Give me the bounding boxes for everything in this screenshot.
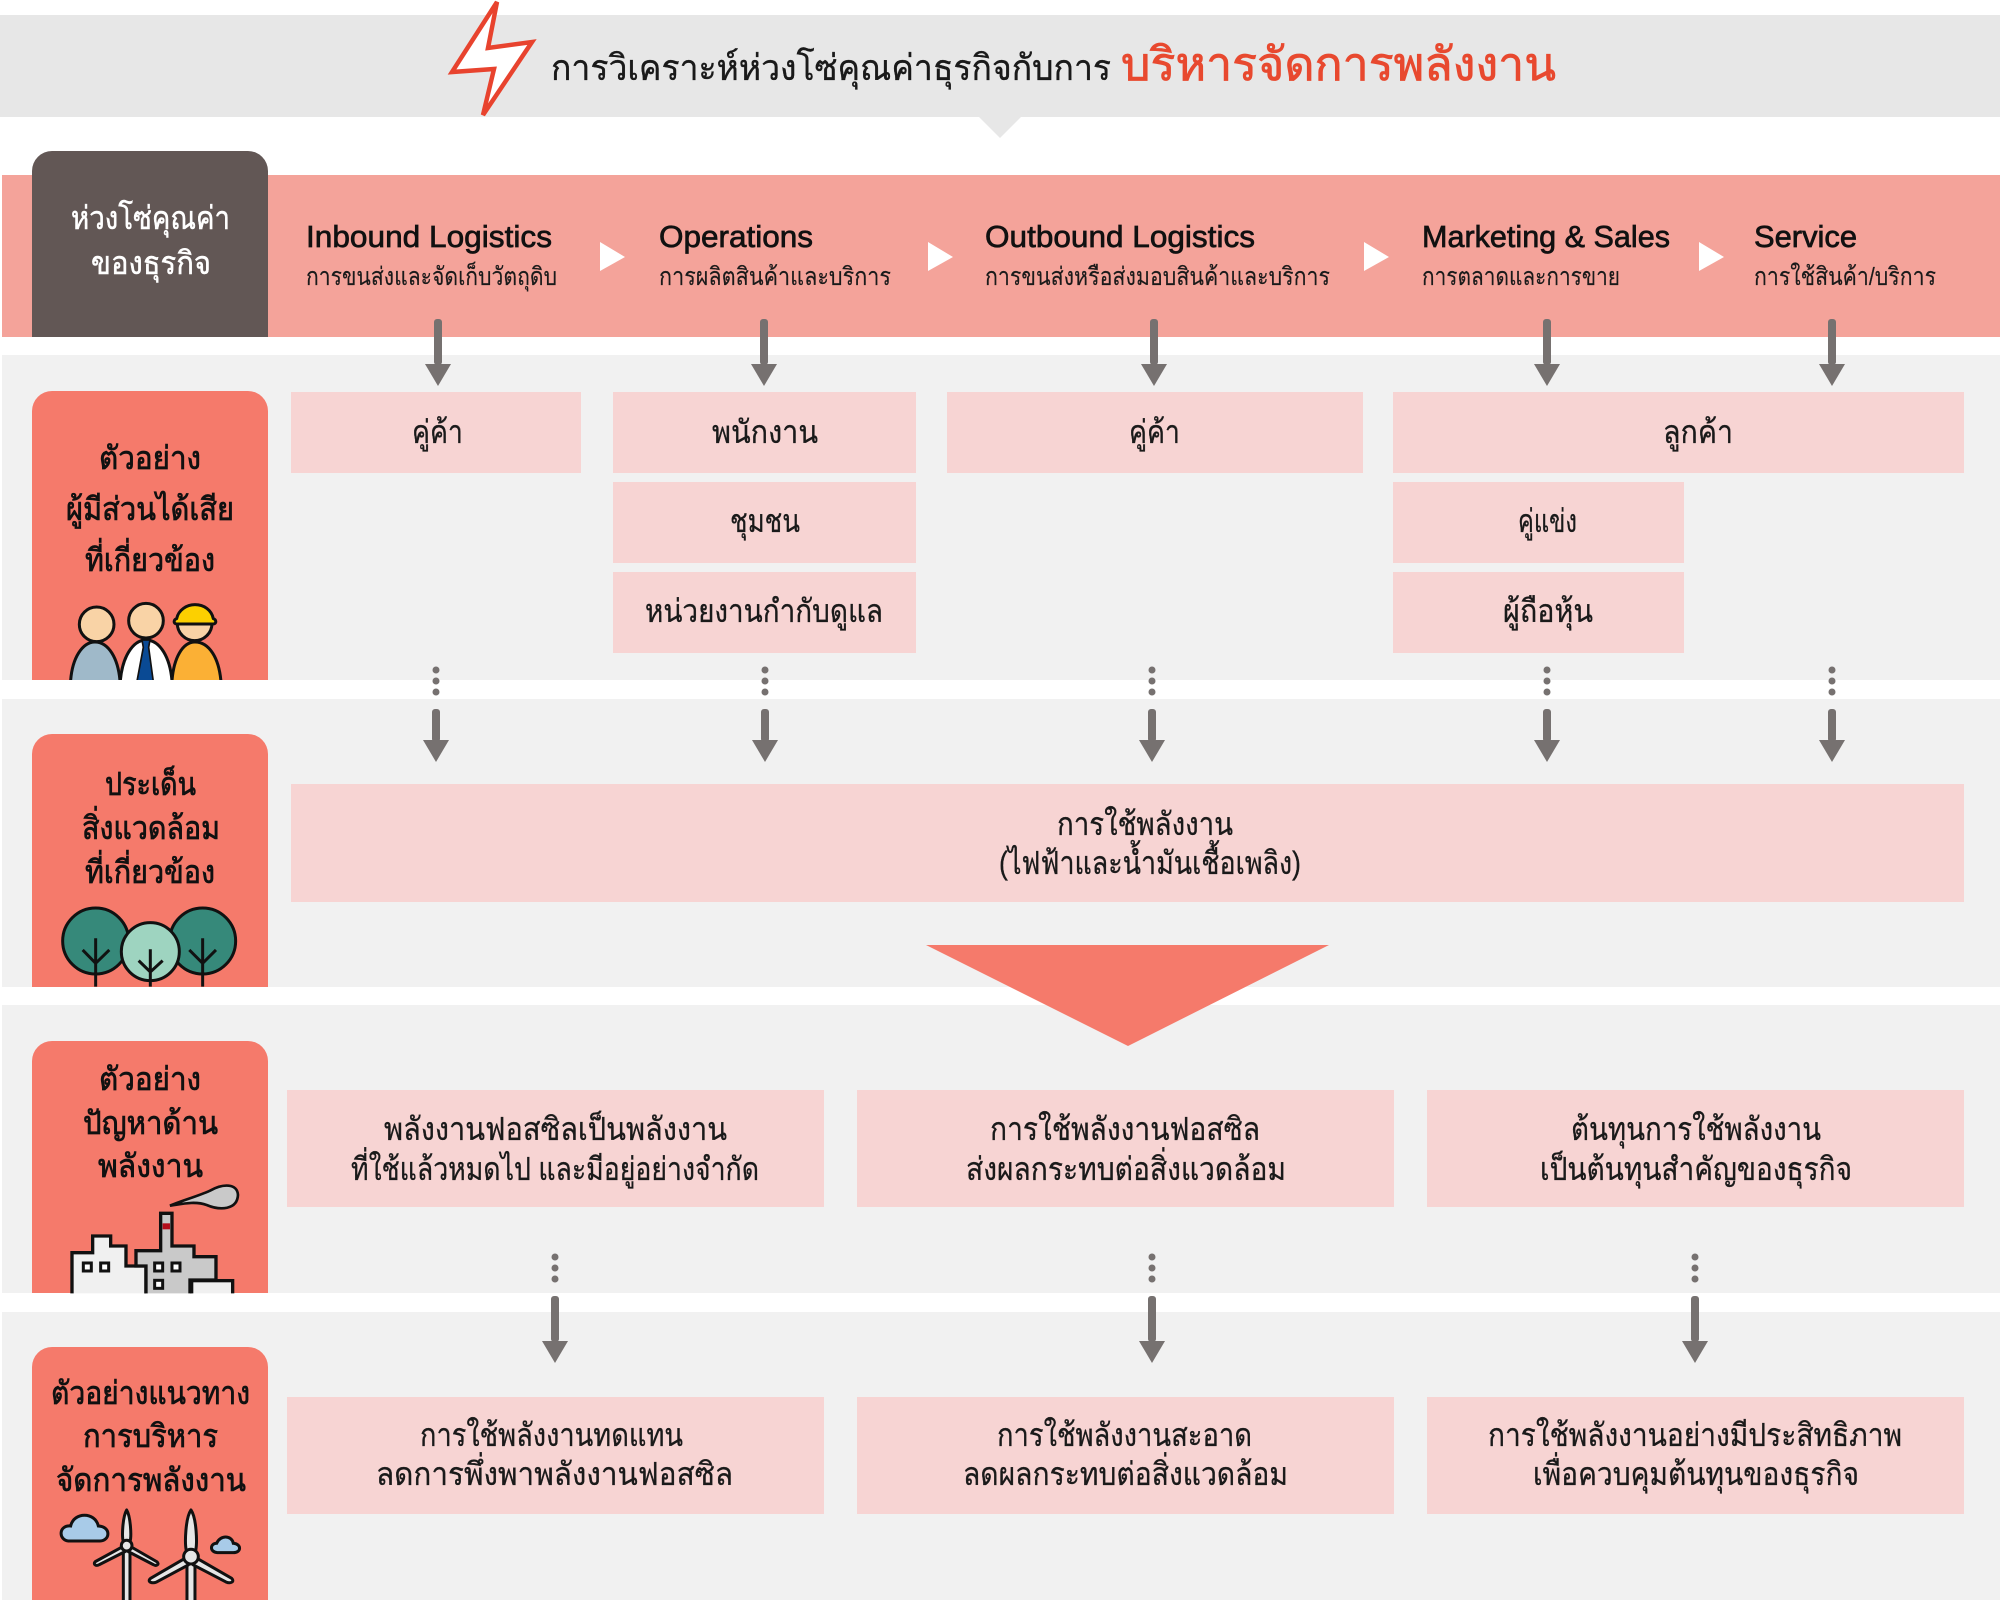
panel: management label: การบริหาร [83, 1418, 218, 1454]
step: Marketing and Sales [1422, 219, 1670, 291]
panel: management label: ตัวอย่างแนวทาง [51, 1375, 250, 1411]
stakeholder cell: partner: คู่ค้า [412, 414, 463, 452]
icon: wind turbines and clouds [61, 1510, 240, 1600]
panel: issues label [32, 1041, 268, 1293]
stakeholder cell: employees: พนักงาน [712, 414, 818, 450]
energy use cell: การใช้พลังงาน [1057, 806, 1233, 842]
icon: lightning bolt [452, 2, 532, 115]
management cell: efficiency [1427, 1397, 1964, 1514]
arrow: step 2 to 3 [928, 242, 953, 271]
issue cell: cost [1427, 1090, 1964, 1207]
stakeholder cell: competitors [1393, 482, 1684, 563]
energy use cell [291, 784, 1964, 902]
stakeholder cell: customers [1393, 392, 1964, 473]
panel: environment label: ที่เกี่ยวข้อง [85, 850, 215, 890]
management cell: efficiency: การใช้พลังงานอย่างมีประสิทธิภาพ [1488, 1417, 1902, 1453]
panel: management background [2, 1312, 2000, 1600]
title: บริหารจัดการพลังงาน [1121, 38, 1556, 90]
panel: environment label: สิ่งแวดล้อม [82, 806, 220, 846]
panel: value chain band [2, 175, 2000, 337]
step: Marketing and Sales: Marketing & Sales [1422, 219, 1670, 254]
arrow: step 3 to 4 [1364, 242, 1389, 271]
stakeholder cell: shareholders: ผู้ถือหุ้น [1503, 593, 1593, 631]
step: Marketing and Sales: การตลาดและการขาย [1422, 263, 1620, 291]
panel: environment background [2, 699, 2000, 987]
management cell: clean energy: การใช้พลังงานสะอาด [997, 1417, 1252, 1453]
management cell: alternative energy: ลดการพึ่งพาพลังงานฟอสซิล [376, 1452, 733, 1492]
step: Inbound Logistics: Inbound Logistics [306, 219, 552, 254]
issue cell: fossil depletion [287, 1090, 824, 1207]
issue cell: environmental impact: การใช้พลังงานฟอสซิล [990, 1111, 1260, 1147]
issue cell: cost: เป็นต้นทุนสำคัญของธุรกิจ [1540, 1150, 1852, 1189]
management cell: alternative energy [287, 1397, 824, 1514]
panel: stakeholders label: ตัวอย่าง [99, 440, 201, 476]
panel: issues label: ตัวอย่าง [99, 1061, 201, 1097]
step: Inbound Logistics: การขนส่งและจัดเก็บวัตถุดิบ [306, 261, 557, 292]
step: Operations: การผลิตสินค้าและบริการ [659, 263, 891, 291]
step: Outbound Logistics: Outbound Logistics [985, 219, 1255, 254]
issue cell: environmental impact [857, 1090, 1394, 1207]
arrow: large triangle [926, 945, 1329, 1046]
title: การวิเคราะห์ห่วงโซ่คุณค่าธุรกิจกับการ [551, 47, 1111, 90]
step: Service: การใช้สินค้า/บริการ [1754, 262, 1936, 291]
arrows: issues to management [542, 1254, 1708, 1363]
arrows: stakeholders to environment [423, 666, 1845, 762]
panel: value chain label: ห่วงโซ่คุณค่า [71, 200, 230, 238]
panel: issues label: พลังงาน [98, 1148, 203, 1184]
step: Operations: Operations [659, 219, 813, 254]
step: Inbound Logistics [306, 219, 557, 292]
panel: issues label: ปัญหาด้าน [83, 1105, 218, 1141]
stakeholder cell: customers: ลูกค้า [1663, 414, 1733, 452]
step: Outbound Logistics [985, 219, 1330, 291]
management cell: clean energy: ลดผลกระทบต่อสิ่งแวดล้อม [963, 1452, 1288, 1492]
panel: management label: จัดการพลังงาน [56, 1462, 246, 1498]
step: Outbound Logistics: การขนส่งหรือส่งมอบสินค้าและบริการ [985, 263, 1330, 291]
panel: value chain label: ของธุรกิจ [91, 245, 211, 283]
panel: environment label: ประเด็น [105, 765, 196, 802]
arrow: step 1 to 2 [600, 242, 625, 271]
panel: stakeholders label [32, 391, 268, 680]
step: Service [1754, 219, 1936, 291]
stakeholder cell: partner 2: คู่ค้า [1129, 414, 1180, 452]
stakeholder cell: community: ชุมชน [730, 503, 800, 541]
icon: people [70, 603, 221, 687]
issue cell: cost: ต้นทุนการใช้พลังงาน [1571, 1111, 1821, 1149]
panel: value chain label [32, 151, 268, 337]
management cell: efficiency: เพื่อควบคุมต้นทุนของธุรกิจ [1533, 1452, 1859, 1494]
step: Operations [659, 219, 891, 291]
management cell: clean energy [857, 1397, 1394, 1514]
arrow: step 4 to 5 [1699, 242, 1724, 271]
panel: issues background [2, 1005, 2000, 1293]
arrows: from chain to stakeholders [425, 319, 1845, 386]
icon: factory [72, 1186, 238, 1301]
stakeholder cell: partner [291, 392, 581, 473]
management cell: alternative energy: การใช้พลังงานทดแทน [420, 1417, 683, 1453]
stakeholder cell: partner 2 [947, 392, 1363, 473]
stakeholder cell: shareholders [1393, 572, 1684, 653]
stakeholder cell: community [613, 482, 916, 563]
step: Service: Service [1754, 219, 1857, 254]
icon: trees [63, 908, 236, 990]
panel: stakeholders background [2, 355, 2000, 680]
stakeholder cell: regulators: หน่วยงานกำกับดูแล [645, 593, 883, 631]
header band [0, 15, 2000, 138]
panel: stakeholders label: ที่เกี่ยวข้อง [85, 538, 215, 578]
panel: management label [32, 1347, 268, 1600]
panel: stakeholders label: ผู้มีส่วนได้เสีย [66, 491, 234, 529]
stakeholder cell: regulators [613, 572, 916, 653]
issue cell: environmental impact: ส่งผลกระทบต่อสิ่งแวดล้อม [966, 1147, 1286, 1187]
stakeholder cell: employees [613, 392, 916, 473]
stakeholder cell: competitors: คู่แข่ง [1518, 503, 1577, 541]
issue cell: fossil depletion: พลังงานฟอสซิลเป็นพลังงาน [384, 1110, 727, 1147]
title [551, 38, 1556, 90]
energy use cell: (ไฟฟ้าและน้ำมันเชื้อเพลิง) [999, 840, 1301, 881]
issue cell: fossil depletion: ที่ใช้แล้วหมดไป และมีอยู่อย่างจำกัด [351, 1147, 759, 1189]
panel: environment label [32, 734, 268, 987]
